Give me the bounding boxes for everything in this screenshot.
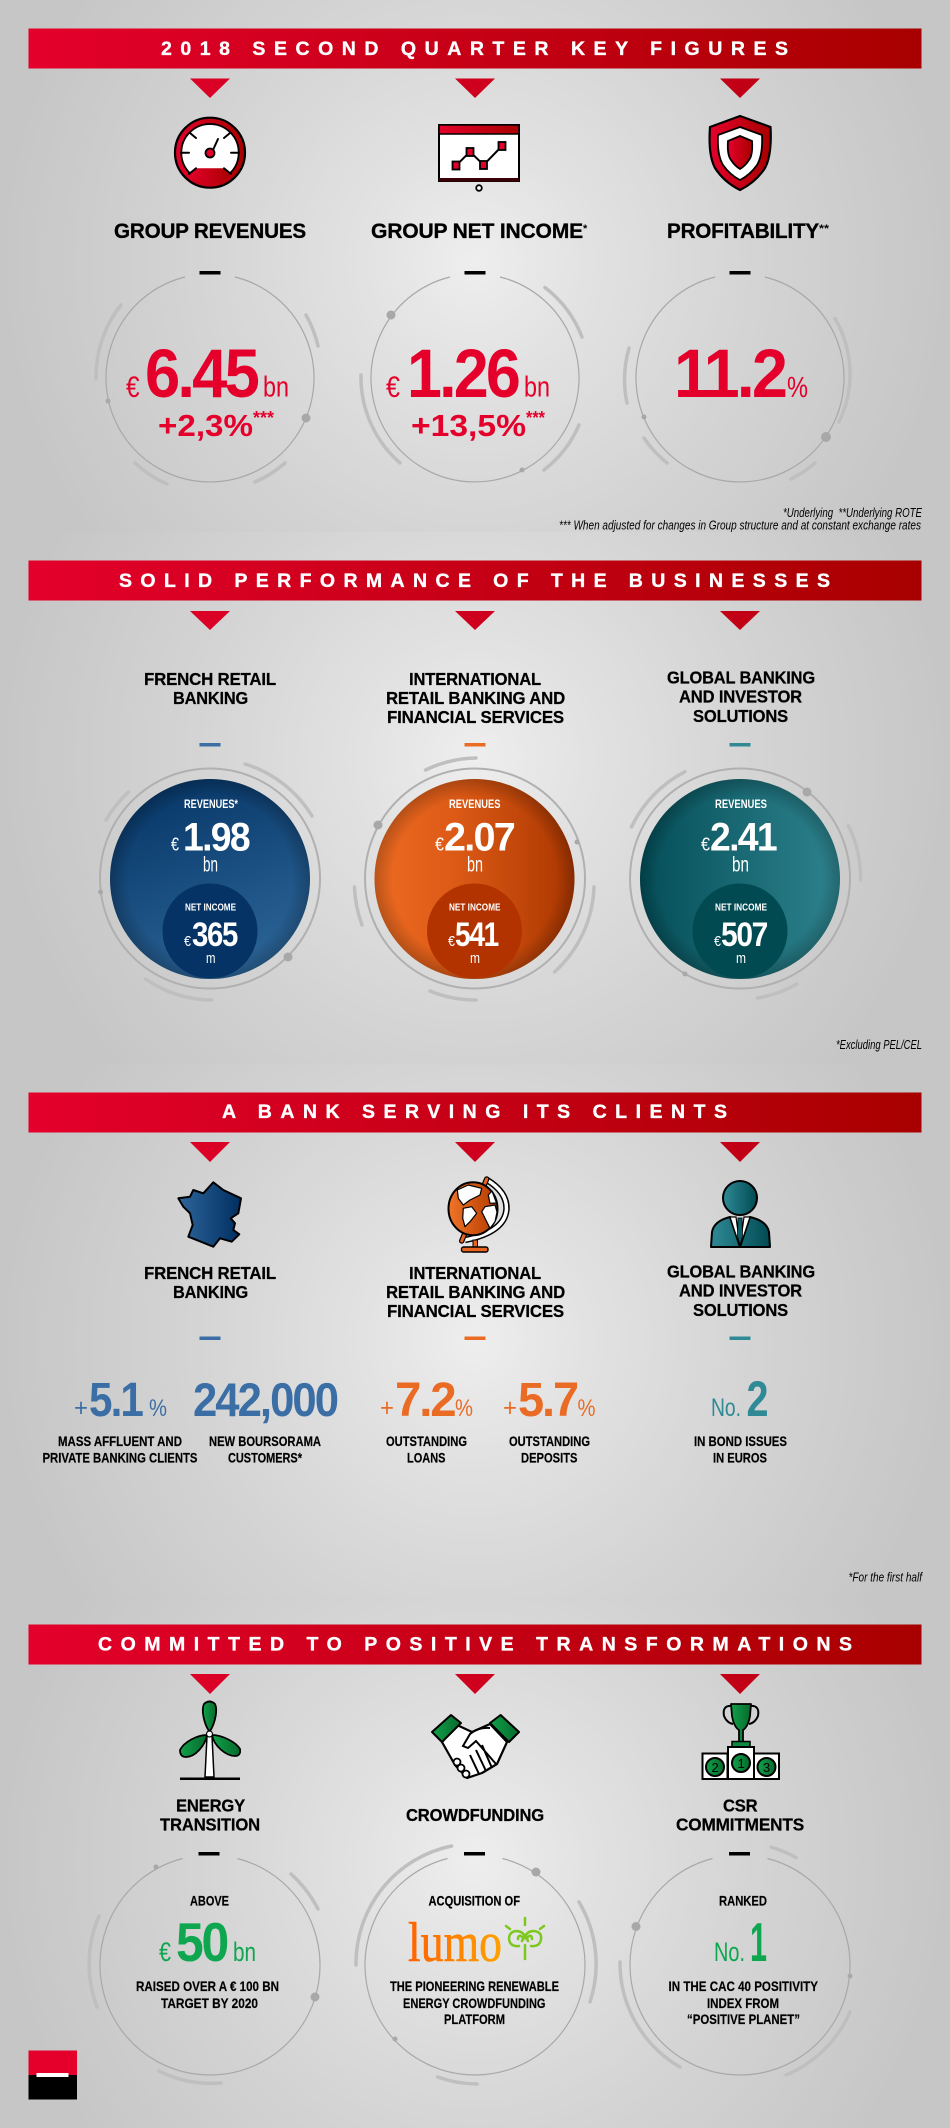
circle: international retail figures: bn <box>467 854 483 876</box>
icon: trophy on podium <box>702 1704 779 1779</box>
stat: 242,000 boursorama: 242,000 <box>193 1373 338 1426</box>
dashes <box>200 271 750 274</box>
heading: group net income: * <box>583 223 588 235</box>
footnotes: section 1 <box>559 505 922 532</box>
heading: global banking: SOLUTIONS <box>693 706 788 726</box>
stat: +7.2% loans: OUTSTANDING <box>386 1433 467 1449</box>
circle: energy transition: ABOVE <box>190 1892 229 1908</box>
footnote: first half: *For the first half <box>848 1570 923 1584</box>
icon: wind turbine <box>180 1702 240 1780</box>
circle: group net income value: bn <box>524 372 550 404</box>
circle: group net income value: *** <box>526 408 545 428</box>
heading: global banking: AND INVESTOR <box>679 1280 802 1300</box>
circle: global banking figures: € <box>714 933 722 950</box>
heading: french retail banking <box>144 1263 276 1302</box>
circle: international retail figures: € <box>435 834 444 854</box>
circle: crowdfunding: PLATFORM <box>444 2011 505 2027</box>
circle: group revenues value: *** <box>253 408 274 428</box>
stat: +7.2% loans: + <box>380 1394 394 1422</box>
circle: international retail figures: m <box>470 950 480 967</box>
heading: global banking <box>667 668 815 726</box>
banner: transformations: COMMITTED TO POSITIVE TRANSFORMATIONS <box>98 1634 852 1656</box>
circle: global banking figures <box>630 768 861 998</box>
circle: international retail figures <box>354 758 594 1000</box>
stat: +7.2% loans: % <box>455 1395 473 1422</box>
heading: group revenues: GROUP REVENUES <box>114 220 306 243</box>
stat: No. 2 bond issues: IN EUROS <box>713 1450 767 1466</box>
heading: international retail banking: INTERNATIONAL <box>409 669 541 689</box>
circle: crowdfunding: ENERGY CROWDFUNDING <box>403 1995 546 2011</box>
circle: group revenues value: +2,3% <box>158 408 253 443</box>
circle: energy transition: bn <box>233 1937 256 1967</box>
circle: group revenues value: € <box>126 371 140 404</box>
heading: energy transition <box>160 1796 260 1834</box>
circle: french retail figures: m <box>206 950 216 967</box>
circle: international retail figures: 2.07 <box>444 816 515 860</box>
heading: international retail banking <box>386 669 565 727</box>
circle: group net income value: € <box>386 371 400 404</box>
panel: a bank serving its clients <box>28 1092 923 1584</box>
arrows: section 2 <box>190 611 760 630</box>
arrows: section 3 <box>190 1142 760 1162</box>
heading: profitability: ** <box>819 223 830 235</box>
circle: profitability value: % <box>787 372 808 404</box>
stat: +5.1% mass affluent: PRIVATE BANKING CLIENTS <box>42 1450 198 1466</box>
circle: global banking figures: REVENUES <box>715 797 767 811</box>
heading: global banking: AND INVESTOR <box>679 686 802 706</box>
icon: shield <box>710 116 771 190</box>
circle: global banking figures: € <box>701 834 710 854</box>
stat: +5.1% mass affluent <box>42 1374 198 1466</box>
stat: +5.1% mass affluent: + <box>74 1394 88 1422</box>
heading: global banking <box>667 1262 815 1320</box>
icon: presentation chart board <box>439 125 519 191</box>
circle: crowdfunding <box>356 1846 596 2084</box>
dashes <box>198 1852 750 1856</box>
heading: global banking: SOLUTIONS <box>693 1300 788 1320</box>
stat: +5.1% mass affluent: % <box>149 1395 167 1422</box>
heading: CSR commitments: CSR <box>723 1796 758 1816</box>
stat: No. 2 bond issues: 2 <box>746 1371 768 1427</box>
stat: +7.2% loans: LOANS <box>407 1450 446 1466</box>
heading: international retail banking: FINANCIAL SERVICES <box>387 1301 564 1321</box>
stat: 242,000 boursorama <box>193 1373 338 1466</box>
panel: committed to positive transformations <box>28 1624 922 2100</box>
stat: +5.7% deposits: 5.7 <box>518 1374 577 1427</box>
heading: french retail banking <box>144 669 276 708</box>
icon: trophy on podium: 2 <box>712 1760 719 1775</box>
circle: crowdfunding: THE PIONEERING RENEWABLE <box>390 1978 559 1994</box>
heading: international retail banking: FINANCIAL SERVICES <box>387 707 564 727</box>
stat: +5.7% deposits: OUTSTANDING <box>509 1433 590 1449</box>
circle: CSR commitments: 1 <box>750 1911 767 1973</box>
circle: crowdfunding: ACQUISITION OF <box>428 1892 520 1908</box>
heading: french retail banking: FRENCH RETAIL <box>144 1263 276 1283</box>
icon: trophy on podium: 1 <box>738 1756 745 1771</box>
circle: global banking figures: 2.41 <box>710 816 777 860</box>
circle: french retail figures: € <box>184 933 192 950</box>
circle: french retail figures: bn <box>203 854 218 876</box>
stat: +5.7% deposits: DEPOSITS <box>521 1450 578 1466</box>
heading: french retail banking: BANKING <box>173 688 248 708</box>
banner: clients <box>28 1092 922 1132</box>
heading: global banking: GLOBAL BANKING <box>667 668 815 688</box>
circle: global banking figures: 507 <box>721 916 768 954</box>
banner: performance: SOLID PERFORMANCE OF THE BUSINESSES <box>119 570 830 592</box>
heading: international retail banking <box>386 1263 565 1321</box>
circle: energy transition <box>89 1858 320 2083</box>
stat: No. 2 bond issues: No. <box>711 1394 741 1422</box>
circle: global banking figures: m <box>736 950 746 967</box>
circle: french retail figures <box>98 764 320 1000</box>
banner: transformations <box>28 1624 922 1664</box>
circle: CSR commitments <box>620 1847 852 2075</box>
heading: international retail banking: RETAIL BANKING AND <box>386 688 565 708</box>
heading: profitability: PROFITABILITY <box>667 220 819 243</box>
stat: +7.2% loans <box>380 1374 473 1466</box>
circle: energy transition: RAISED OVER A € 100 BN <box>136 1978 279 1994</box>
circle: french retail figures: 1.98 <box>183 816 250 860</box>
dashes: coloured <box>200 1336 750 1340</box>
circle: group revenues value <box>96 277 318 484</box>
heading: energy transition: ENERGY <box>176 1796 245 1816</box>
heading: french retail banking: BANKING <box>173 1282 248 1302</box>
circle: international retail figures: REVENUES <box>449 797 500 811</box>
circle: french retail figures: 365 <box>192 916 238 954</box>
stat: +5.1% mass affluent: MASS AFFLUENT AND <box>58 1433 182 1449</box>
circle: CSR commitments: INDEX FROM <box>707 1995 779 2011</box>
heading: CSR commitments: COMMITMENTS <box>676 1814 804 1834</box>
stat: +5.1% mass affluent: 5.1 <box>89 1374 143 1427</box>
icon: handshake <box>432 1715 519 1778</box>
banner: clients: A BANK SERVING ITS CLIENTS <box>222 1101 727 1123</box>
stat: No. 2 bond issues <box>694 1371 787 1466</box>
heading: CSR commitments <box>676 1796 804 1834</box>
icon: map of France <box>178 1182 241 1247</box>
circle: group net income value: 1.26 <box>407 335 519 412</box>
heading: crowdfunding: CROWDFUNDING <box>406 1805 544 1825</box>
arrows: section 4 <box>190 1674 760 1694</box>
icon: business person <box>711 1181 770 1247</box>
circle: group revenues value: bn <box>263 372 289 404</box>
icon: speedometer gauge <box>175 118 245 188</box>
circle: global banking figures: bn <box>732 854 749 876</box>
heading: french retail banking: FRENCH RETAIL <box>144 669 276 689</box>
icon: globe <box>448 1179 507 1252</box>
circle: energy transition: 50 <box>176 1911 228 1973</box>
circle: profitability value <box>625 277 850 482</box>
circle: international retail figures: NET INCOME <box>449 902 500 914</box>
banner: key figures: 2018 SECOND QUARTER KEY FIGURES <box>161 38 788 60</box>
heading: energy transition: TRANSITION <box>160 1814 260 1834</box>
circle: group net income value <box>361 277 582 482</box>
logo: Societe Generale square <box>28 2050 77 2100</box>
circle: french retail figures: REVENUES* <box>184 797 238 811</box>
stat: +5.7% deposits <box>503 1374 596 1466</box>
banner: performance <box>28 560 922 600</box>
heading: global banking: GLOBAL BANKING <box>667 1262 815 1282</box>
circle: international retail figures: € <box>448 933 456 950</box>
stat: No. 2 bond issues: IN BOND ISSUES <box>694 1433 787 1449</box>
stat: +5.7% deposits: % <box>578 1395 596 1422</box>
heading: international retail banking: INTERNATIONAL <box>409 1263 541 1283</box>
logo: lumo: lumo <box>408 1912 502 1974</box>
circle: group revenues value: 6.45 <box>145 335 259 412</box>
stat: 242,000 boursorama: NEW BOURSORAMA <box>209 1433 321 1449</box>
panel: 2018 second quarter key figures <box>28 28 922 532</box>
circle: CSR commitments: IN THE CAC 40 POSITIVITY <box>668 1978 819 1994</box>
stat: 242,000 boursorama: CUSTOMERS* <box>228 1450 302 1466</box>
circle: CSR commitments: “POSITIVE PLANET” <box>687 2011 800 2027</box>
circle: group net income value: +13,5% <box>411 408 526 443</box>
stat: +7.2% loans: 7.2 <box>395 1374 455 1427</box>
arrows: section 1 <box>190 78 760 98</box>
circle: french retail figures: NET INCOME <box>185 902 236 914</box>
heading: international retail banking: RETAIL BANKING AND <box>386 1282 565 1302</box>
circle: energy transition: TARGET BY 2020 <box>161 1995 258 2011</box>
heading: group net income: GROUP NET INCOME <box>371 220 583 243</box>
circle: CSR commitments: RANKED <box>719 1892 767 1908</box>
circle: international retail figures: 541 <box>455 916 499 954</box>
circle: energy transition: € <box>159 1937 171 1967</box>
dashes: coloured <box>200 743 750 746</box>
icon: trophy on podium: 3 <box>763 1760 770 1775</box>
panel: solid performance of the businesses <box>28 560 922 1052</box>
circle: CSR commitments: No. <box>714 1937 745 1967</box>
circle: french retail figures: € <box>171 834 179 854</box>
circle: profitability value: 11.2 <box>674 335 786 412</box>
circle: global banking figures: NET INCOME <box>715 902 767 914</box>
banner: key figures <box>28 28 922 68</box>
stat: +5.7% deposits: + <box>503 1394 517 1422</box>
